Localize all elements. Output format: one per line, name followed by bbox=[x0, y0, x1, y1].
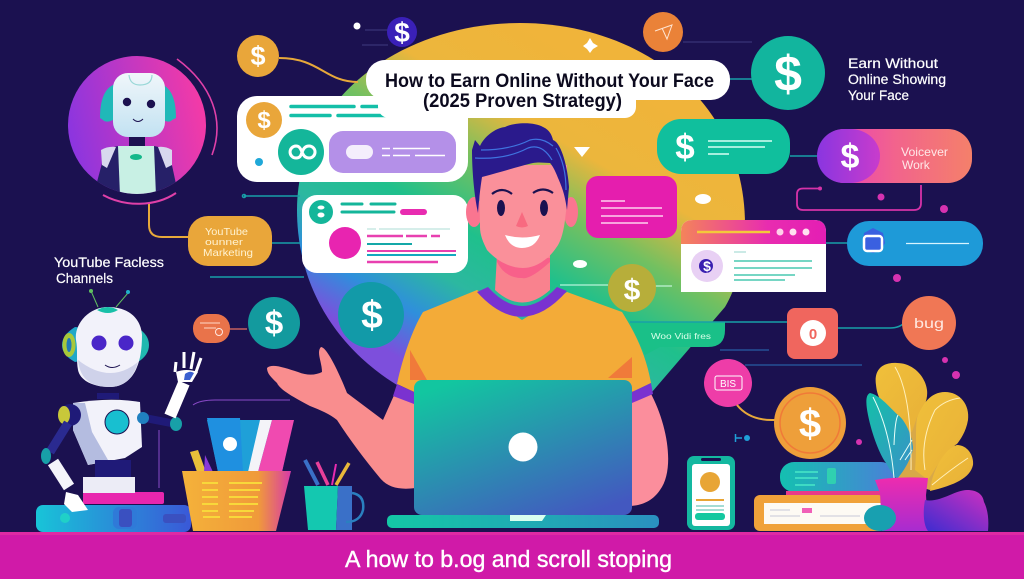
gold coin bbox=[737, 387, 846, 459]
browser card: $ bbox=[703, 258, 711, 274]
coral square icon bbox=[787, 308, 838, 359]
nose bbox=[516, 212, 528, 228]
body bbox=[73, 400, 142, 493]
circle label: bug: bug bbox=[914, 315, 944, 331]
eyes bbox=[497, 200, 548, 216]
dollar icon: olive on blob: $ bbox=[624, 274, 641, 307]
connector to orange label bbox=[149, 204, 190, 237]
green tab: Woo Vidi fres bbox=[630, 322, 725, 355]
laptop bbox=[387, 380, 659, 528]
orange book bbox=[754, 491, 886, 531]
dollar icon: indigo bbox=[354, 17, 417, 48]
plant bbox=[866, 363, 973, 491]
text: YouTube Faceless Channels: Channels bbox=[56, 271, 113, 286]
neck bbox=[97, 393, 119, 399]
text: YouTube Faceless Channels: YouTube Facless bbox=[54, 255, 164, 270]
central gradient blob bbox=[297, 23, 745, 392]
smile bbox=[505, 235, 540, 248]
phone bbox=[687, 456, 735, 530]
hair bbox=[472, 123, 569, 213]
face bbox=[479, 165, 567, 268]
white card two bbox=[302, 195, 468, 273]
dollar icon: teal bbox=[248, 297, 300, 349]
base device bbox=[36, 505, 191, 532]
orange label: YouTube Marketing: YouTube bbox=[205, 226, 248, 238]
hair highlights bbox=[475, 139, 566, 190]
antennae bbox=[89, 289, 130, 307]
pink circle icon bbox=[704, 350, 862, 407]
gold coin: $ bbox=[799, 402, 821, 446]
text: Earn Without Online Showing Your Face: Earn Without bbox=[848, 56, 938, 71]
pill: Voiceover Work: Work bbox=[902, 158, 931, 172]
text: Earn Without Online Showing Your Face: Online Showing bbox=[848, 72, 946, 87]
orange label: YouTube Marketing: ounner bbox=[205, 237, 243, 248]
white card one bbox=[237, 96, 468, 182]
text: Earn Without Online Showing Your Face: Your Face bbox=[848, 88, 909, 103]
dollar icon: large teal: $ bbox=[774, 46, 802, 102]
robot with keyboard bbox=[36, 289, 201, 532]
teal pill with dollar bbox=[657, 119, 820, 174]
pill: Voiceover Work: Voicever bbox=[901, 145, 948, 159]
head bbox=[76, 307, 142, 387]
magenta dots bbox=[856, 194, 960, 445]
shirt shading bbox=[410, 350, 632, 380]
robot avatar bbox=[68, 56, 217, 204]
bottom banner: A how to b.og and scroll stoping bbox=[345, 546, 672, 572]
connector lines left bbox=[210, 194, 304, 277]
title bbox=[366, 60, 730, 118]
orange label: YouTube Marketing: Marketing bbox=[203, 247, 253, 259]
collar bbox=[477, 287, 567, 317]
left arm bbox=[41, 404, 88, 512]
chin shadow bbox=[497, 258, 550, 278]
magenta message card bbox=[586, 176, 677, 238]
pill: Voiceover Work: $ bbox=[841, 138, 860, 176]
orange mini pill bbox=[193, 314, 247, 343]
dollar icon: indigo: $ bbox=[394, 17, 410, 48]
headphones bbox=[62, 327, 149, 362]
browser card bbox=[681, 220, 826, 292]
sleeve bands bbox=[393, 383, 653, 404]
purple stones bbox=[924, 490, 988, 531]
shelf details near basket bbox=[159, 400, 290, 488]
connector to coral square bbox=[630, 321, 787, 323]
dollar icon: large teal bbox=[730, 36, 825, 110]
shirt bbox=[397, 290, 651, 392]
right arm bbox=[137, 352, 201, 431]
left arm and hand bbox=[267, 347, 416, 489]
dollar icon: orange with connector bbox=[237, 35, 358, 82]
circle label: bug bbox=[838, 296, 956, 350]
orange label: YouTube Marketing bbox=[188, 216, 272, 266]
dollar icon: olive on blob bbox=[560, 264, 672, 312]
dollar icon: orange with connector: $ bbox=[250, 41, 266, 71]
teal book bbox=[780, 462, 895, 492]
coral square icon: 0 bbox=[809, 326, 817, 343]
sparkle decorations bbox=[573, 38, 711, 268]
blue pill bbox=[826, 221, 983, 266]
bottom banner bbox=[0, 532, 1024, 579]
pink circle icon: BIS bbox=[720, 379, 736, 390]
ears bbox=[466, 197, 578, 227]
person bbox=[267, 123, 668, 506]
teal pill with dollar: $ bbox=[675, 128, 695, 167]
magenta book bbox=[83, 492, 164, 504]
basket with files bbox=[182, 418, 294, 531]
green tab: Woo Vidi fres: Woo Vidi fres bbox=[651, 331, 711, 341]
small decorations bbox=[735, 434, 750, 442]
dollar icon: teal on blob bbox=[338, 282, 404, 348]
title: How to Earn Online Without Your Face bbox=[385, 70, 714, 92]
title: (2025 Proven Strategy) bbox=[423, 90, 622, 112]
loop connector bbox=[797, 185, 921, 210]
flower pot bbox=[864, 477, 928, 531]
right arm bbox=[628, 392, 668, 506]
icon: orange arrow circle bbox=[643, 12, 752, 52]
mug with pencils bbox=[304, 460, 363, 530]
white card one: $ bbox=[257, 107, 271, 134]
dollar icon: teal: $ bbox=[265, 304, 283, 341]
neck bbox=[495, 255, 550, 302]
eyebrows bbox=[492, 190, 553, 194]
pill: Voiceover Work bbox=[817, 129, 972, 183]
dollar icon: teal on blob: $ bbox=[361, 294, 383, 337]
